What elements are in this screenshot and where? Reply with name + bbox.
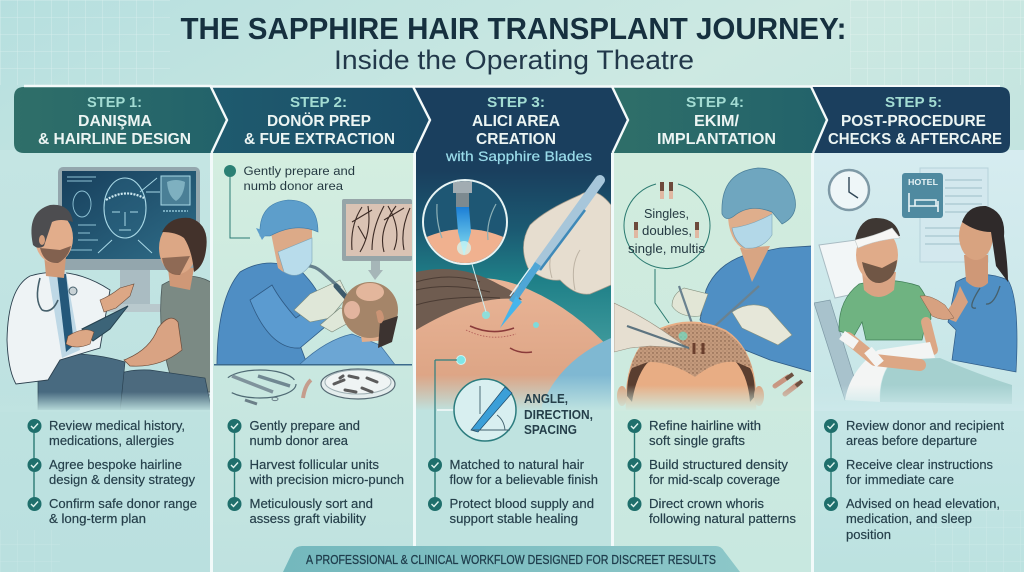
fade: step 1 illustration (0, 392, 210, 412)
checklist: step 1 (28, 419, 197, 526)
checklist: step 5: for immediate care (846, 473, 954, 487)
illustration: step 4 implantation (614, 168, 812, 413)
scalp (416, 269, 611, 413)
gloved hand with scalpel (500, 180, 611, 328)
illustration: step 1 consultation (7, 167, 214, 412)
illustration: step 5 aftercare (814, 168, 1017, 404)
checklist: step 4: Direct crown whoris (649, 497, 764, 511)
title (180, 11, 846, 75)
checklist: step 2: numb donor area (250, 434, 348, 448)
panel: step 4 background (614, 150, 811, 572)
checklist: step 1: & long-term plan (49, 512, 146, 526)
fade: step 4 illustration (614, 385, 811, 411)
title: THE SAPPHIRE HAIR TRANSPLANT JOURNEY: (180, 11, 846, 46)
illustration: doctor (7, 205, 134, 412)
chevron: step 4: EKIM/ (694, 113, 740, 130)
chevron: step 3: STEP 3: (487, 95, 545, 111)
chevron: step 5 (812, 87, 1010, 153)
chevron: step 5: CHECKS & AFTERCARE (828, 131, 1002, 148)
panel: step 3 background (416, 150, 611, 572)
illustration: bed and patient (814, 218, 1012, 404)
checklist: step 1: design & density strategy (49, 473, 196, 487)
subtitle: Inside the Operating Theatre (334, 45, 694, 75)
checklist: step 3: Matched to natural hair (450, 458, 584, 472)
check icon (824, 497, 838, 511)
illustration: patient (120, 218, 210, 410)
chevron: step 2: DONÖR PREP (267, 113, 371, 130)
checklist: step 2: assess graft viability (250, 512, 367, 526)
chevron: step 5: STEP 5: (885, 95, 942, 111)
chevron: step 4: IMPLANTATION (657, 131, 776, 148)
callout: angle, direction, spacing: SPACING (524, 422, 577, 437)
checklist: step 5: Advised on head elevation, (846, 497, 1000, 511)
check icon (228, 458, 242, 472)
inset: blade in scalp (420, 180, 510, 270)
column dividers (210, 153, 814, 572)
chevron: step 3: ALICI AREA (472, 113, 560, 130)
check icon (28, 419, 42, 433)
check icon (628, 497, 642, 511)
callout: angle, direction, spacing: ANGLE, (524, 391, 568, 406)
document background (920, 168, 988, 262)
illustration: step 3 sapphire blade (416, 180, 611, 413)
checklist: step 2: Harvest follicular units (250, 458, 379, 472)
chevron: step 4 (610, 86, 827, 153)
chevron: step 3: CREATION (476, 131, 556, 148)
checklist: step 2 (228, 419, 404, 526)
checklist: step 4: for mid-scalp coverage (649, 473, 780, 487)
callout: gently prepare (224, 164, 355, 238)
callout: angle, direction, spacing (435, 360, 593, 465)
check icon (824, 458, 838, 472)
icon: hairline design monitor (58, 167, 200, 312)
chevron: step 1: & HAIRLINE DESIGN (38, 131, 191, 148)
illustration: surgeon and patient (217, 200, 398, 372)
footer banner: A PROFESSIONAL & CLINICAL WORKFLOW DESIGNED FOR DISCREET RESULTS (306, 553, 716, 567)
checklist: step 2: with precision micro-punch (248, 473, 404, 487)
checklist: step 2: Meticulously sort and (250, 497, 373, 511)
checklist: step 4: following natural patterns (649, 512, 796, 526)
fade: step 5 illustration (814, 385, 1024, 411)
checklist: step 4: Build structured density (649, 458, 789, 472)
callout: angle, direction, spacing: DIRECTION, (524, 407, 593, 422)
illustration: nurse (672, 168, 812, 372)
chevron: step 1: DANIŞMA (78, 113, 152, 130)
chevron: step 1 (14, 86, 227, 153)
chevron: step 3: with Sapphire Blades (445, 148, 592, 164)
illustration: step 2 donor preparation (214, 164, 412, 404)
checklist: step 1: Agree bespoke hairline (49, 458, 182, 472)
checklist: step 4: soft single grafts (649, 434, 745, 448)
divider: step 2 floor line (214, 364, 412, 366)
check icon (228, 419, 242, 433)
chevron: step 2 (208, 86, 430, 153)
checklist: step 5: position (846, 528, 891, 542)
illustration: nurse (920, 206, 1017, 372)
checklist: step 5: areas before departure (846, 434, 977, 448)
patient head and gown (298, 334, 396, 366)
check icon (428, 458, 442, 472)
checklist: step 3 (428, 458, 598, 526)
chevron: step 3 (412, 86, 628, 164)
checklist: step 1: Confirm safe donor range (49, 497, 197, 511)
chevron: step 2: STEP 2: (290, 95, 347, 111)
illustration: surgical tools (224, 369, 395, 404)
chevron: step 5: POST-PROCEDURE (841, 113, 986, 130)
icon: hotel sign (902, 173, 943, 218)
callout: gently prepare: Gently prepare and (244, 164, 355, 178)
check icon (228, 497, 242, 511)
fade: step 3 illustration (416, 375, 611, 411)
inset: follicle magnification (342, 199, 412, 280)
chevron: step 4: STEP 4: (686, 95, 744, 111)
checklist: step 4 (628, 419, 796, 526)
callout: graft types (624, 182, 710, 323)
check icon (628, 458, 642, 472)
checklist: step 1: Review medical history, (49, 419, 185, 433)
checklist: step 3: support stable healing (450, 512, 578, 526)
check icon (28, 458, 42, 472)
check icon (428, 497, 442, 511)
callout: graft types: Singles, (644, 207, 689, 221)
callout: graft types: single, multis (628, 242, 705, 256)
callout: graft types: doubles, (642, 224, 692, 238)
checklist: step 5: Receive clear instructions (846, 458, 993, 472)
check icon (28, 497, 42, 511)
checklist: step 5: medication, and sleep (846, 512, 972, 526)
icon: hotel sign: HOTEL (908, 177, 938, 187)
chevron header bar (14, 86, 1010, 164)
checklist: step 1: medications, allergies (49, 434, 174, 448)
illustration: scalp receiving grafts (614, 303, 802, 413)
checklist: step 4: Refine hairline with (649, 419, 761, 433)
check icon (824, 419, 838, 433)
panel: step 5 background (814, 150, 1024, 572)
check icon (628, 419, 642, 433)
chevron: step 1: STEP 1: (87, 95, 142, 111)
checklist: step 3: Protect blood supply and (450, 497, 594, 511)
checklist: step 5: Review donor and recipient (846, 419, 1005, 433)
panel: step 1 background (0, 150, 210, 572)
footer banner (283, 546, 740, 572)
icon: clock (829, 170, 869, 210)
checklist: step 3: flow for a believable finish (450, 473, 598, 487)
callout: gently prepare: numb donor area (244, 179, 343, 193)
checklist: step 2: Gently prepare and (250, 419, 360, 433)
panel: step 2 background (213, 150, 413, 572)
checklist: step 5 (824, 419, 1005, 542)
chevron: step 2: & FUE EXTRACTION (244, 131, 395, 148)
